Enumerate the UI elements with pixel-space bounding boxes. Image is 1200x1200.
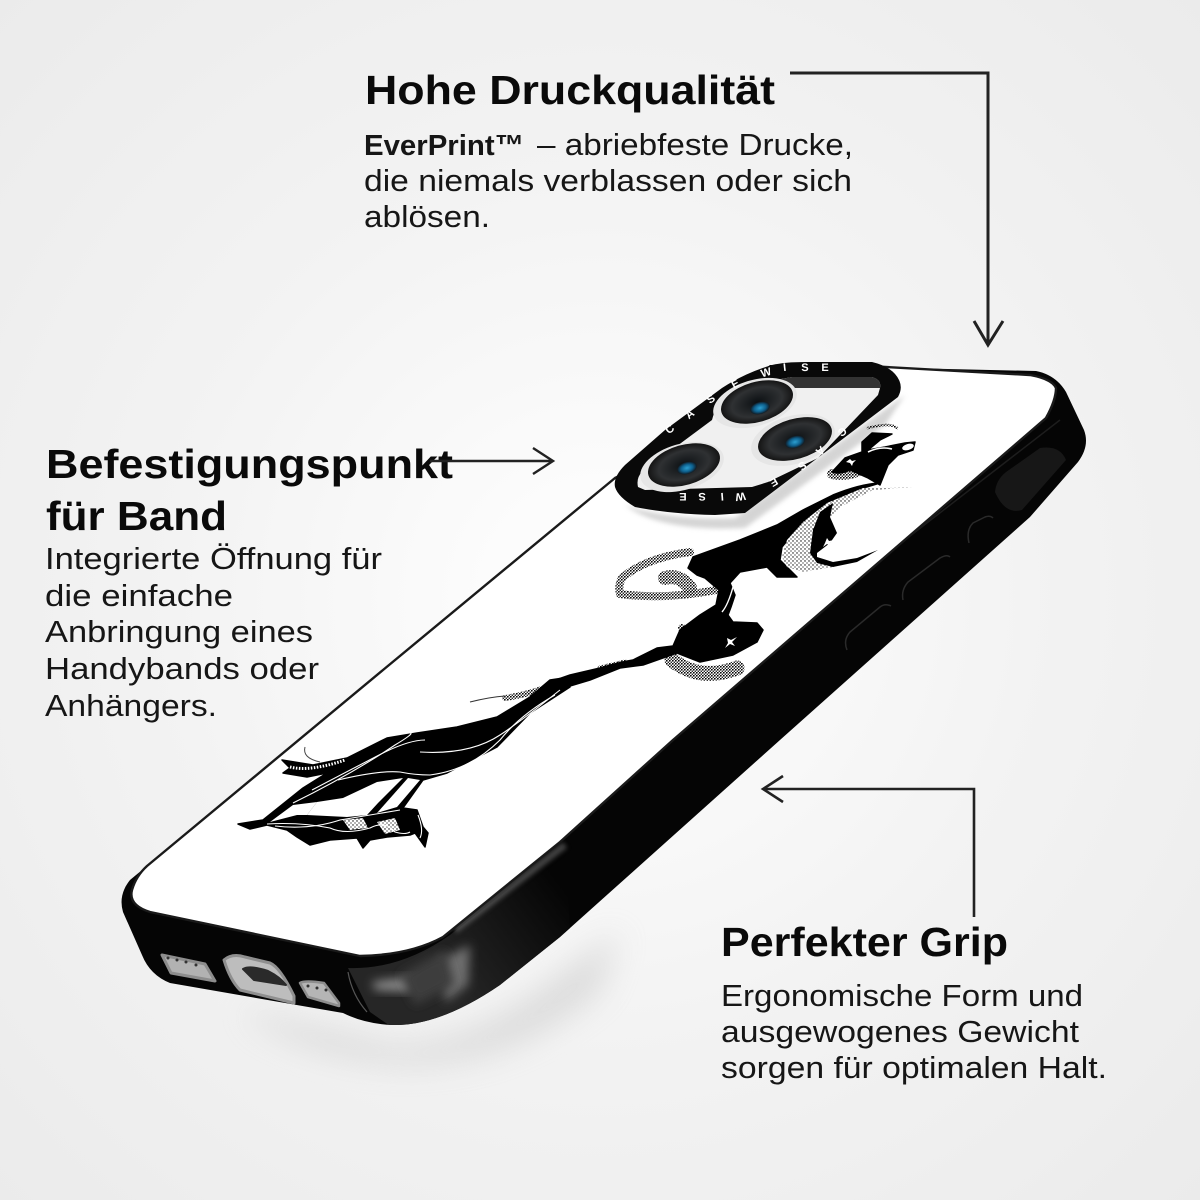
text block: grip: sorgen für optimalen Halt. — [721, 1050, 1107, 1085]
corner sheen — [348, 845, 570, 1028]
text block: EverPrint: EverPrint™ — [364, 130, 524, 162]
CASEWISE ring lettering: S — [698, 490, 706, 502]
CASEWISE ring lettering — [663, 362, 849, 503]
CASEWISE ring lettering: C — [663, 423, 677, 437]
text block: band attachment: Handybands oder — [45, 651, 319, 686]
inner crescent — [810, 503, 878, 567]
heading: Befestigungspunkt für Band — [46, 441, 453, 539]
CASEWISE ring lettering: S — [795, 458, 808, 472]
charging and speaker ports — [162, 955, 339, 1006]
camera window inner shadow — [745, 377, 880, 388]
text block: grip — [721, 978, 1107, 1085]
text block: EverPrint: die niemals verblassen oder sich — [364, 163, 852, 198]
heading: Hohe Druckqualität: Hohe Druckqualität — [365, 67, 775, 113]
floating blob — [832, 433, 915, 485]
white body streaks — [267, 690, 560, 838]
camera shadow — [625, 395, 905, 529]
camera window — [638, 377, 880, 490]
CASEWISE ring lettering: E — [679, 490, 687, 502]
text block: grip: Ergonomische Form und — [721, 978, 1083, 1013]
text block: EverPrint: ablösen. — [364, 199, 490, 234]
side buttons — [698, 420, 1060, 700]
text block: band attachment: Anhängers. — [45, 688, 217, 723]
moon stipple — [782, 487, 912, 572]
arrow: print quality — [790, 73, 1003, 345]
CASEWISE ring lettering: S — [705, 393, 718, 407]
text block: grip: ausgewogenes Gewicht — [721, 1014, 1079, 1049]
fine hair strokes — [470, 696, 505, 702]
text block: band attachment: die einfache — [45, 578, 233, 613]
drop shadow — [240, 930, 620, 1064]
heading: Befestigungspunkt für Band: Befestigungspunkt — [46, 441, 453, 487]
camera ring — [615, 362, 901, 515]
heading: Befestigungspunkt für Band: für Band — [46, 493, 227, 539]
tail stipple — [290, 760, 345, 768]
CASEWISE ring lettering: C — [835, 424, 849, 439]
arrow: band attachment — [430, 448, 553, 474]
text block: band attachment — [45, 541, 382, 723]
mute switch — [995, 448, 1066, 511]
cut-outs between legs — [307, 778, 403, 817]
text block: EverPrint: – abriebfeste Drucke, — [537, 127, 853, 162]
arrow: grip — [763, 776, 974, 917]
stars — [725, 637, 737, 648]
CASEWISE ring lettering: A — [813, 443, 827, 458]
smoke and neck — [550, 483, 880, 686]
whale body and legs — [238, 677, 570, 848]
lenses — [634, 369, 841, 501]
CASEWISE ring lettering: E — [730, 377, 742, 391]
CASEWISE ring lettering: W — [734, 489, 746, 503]
phone case illustration — [122, 362, 1086, 1064]
text block: EverPrint — [364, 127, 853, 234]
CASEWISE ring lettering: W — [760, 366, 773, 380]
heading: Perfekter Grip: Perfekter Grip — [721, 919, 1008, 965]
artwork: cosmic whale — [238, 425, 915, 848]
text block: band attachment: Integrierte Öffnung für — [45, 541, 382, 576]
CASEWISE ring lettering: E — [767, 475, 780, 489]
CASEWISE ring lettering: I — [720, 490, 724, 502]
CASEWISE ring lettering: I — [783, 362, 787, 374]
ground stipple — [343, 818, 400, 834]
CASEWISE ring lettering: S — [801, 362, 809, 374]
white back face — [131, 365, 1056, 956]
stipple clouds — [505, 425, 897, 698]
case body — [122, 365, 1086, 1025]
CASEWISE ring lettering: A — [683, 407, 697, 422]
text block: band attachment: Anbringung eines — [45, 614, 313, 649]
CASEWISE ring lettering: E — [821, 362, 829, 374]
